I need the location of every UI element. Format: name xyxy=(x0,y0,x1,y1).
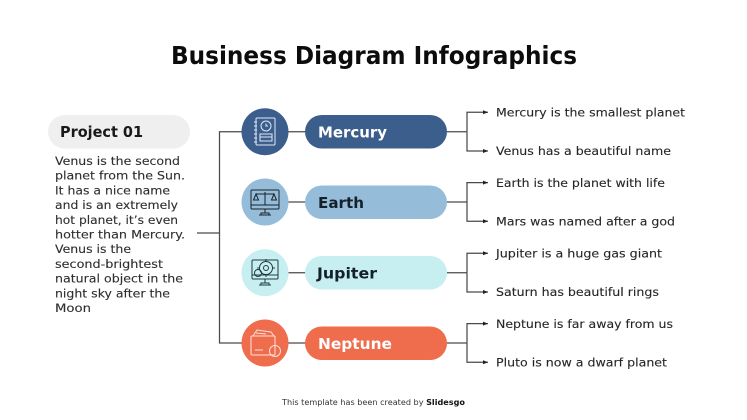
row: Jupiter xyxy=(242,246,662,299)
icon: wallet with coin xyxy=(242,320,288,366)
project body text: hotter than Mercury. xyxy=(55,228,185,242)
text: Mercury fact 2: Venus has a beautiful name xyxy=(496,144,671,158)
icon: monitor with scales xyxy=(242,178,288,226)
label pill: Jupiter: Jupiter xyxy=(316,264,377,282)
footer credit: This template has been created by Slidesgo xyxy=(281,398,466,407)
project body text xyxy=(55,154,185,315)
text: Jupiter fact 2: Saturn has beautiful rings xyxy=(496,285,659,299)
project body text: night sky after the xyxy=(55,286,170,300)
project body text: Venus is the second xyxy=(55,154,180,168)
label pill: Earth xyxy=(305,186,447,219)
arrow: Neptune fact 2 xyxy=(467,343,488,362)
label pill: Neptune xyxy=(305,326,447,360)
row: Mercury xyxy=(242,106,685,158)
project body text: It has a nice name xyxy=(55,183,170,197)
arrow: Mercury fact 2 xyxy=(467,132,488,151)
connector: project to branches xyxy=(197,132,242,343)
label pill: Mercury xyxy=(305,115,447,148)
arrow: Jupiter fact 1 xyxy=(467,253,488,273)
text: Neptune fact 1: Neptune is far away from us xyxy=(496,317,673,331)
text: Mercury fact 1: Mercury is the smallest planet xyxy=(496,106,685,120)
text: Neptune fact 2: Pluto is now a dwarf planet xyxy=(496,356,667,370)
text: Jupiter fact 1: Jupiter is a huge gas giant xyxy=(495,246,662,260)
project heading pill: Project 01 xyxy=(60,123,143,141)
text: Earth fact 2: Mars was named after a god xyxy=(496,214,675,228)
label pill: Earth: Earth xyxy=(318,194,364,212)
label pill: Jupiter xyxy=(305,256,447,290)
title: Business Diagram Infographics xyxy=(171,41,577,70)
label pill: Mercury: Mercury xyxy=(318,124,387,142)
project body text: second-brightest xyxy=(55,257,163,271)
project body text: natural object in the xyxy=(55,272,183,286)
row: Neptune xyxy=(242,317,673,370)
arrow: Neptune fact 1 xyxy=(467,324,488,343)
arrow: Jupiter fact 2 xyxy=(467,273,488,292)
arrow: Earth fact 1 xyxy=(467,183,488,202)
project body text: and is an extremely xyxy=(55,198,178,212)
project heading pill xyxy=(48,115,190,148)
icon: monitor with gear xyxy=(242,249,288,296)
icon: notebook xyxy=(242,108,288,155)
label pill: Neptune: Neptune xyxy=(318,335,392,353)
project body text: hot planet, it’s even xyxy=(55,213,178,227)
panel: project description xyxy=(48,115,190,315)
arrow: Mercury fact 1 xyxy=(467,112,488,132)
project body text: Moon xyxy=(55,301,91,315)
project body text: planet from the Sun. xyxy=(55,169,185,183)
row: Earth xyxy=(242,176,675,228)
arrow: Earth fact 2 xyxy=(467,202,488,221)
project body text: Venus is the xyxy=(55,242,131,256)
text: Earth fact 1: Earth is the planet with life xyxy=(496,176,665,190)
